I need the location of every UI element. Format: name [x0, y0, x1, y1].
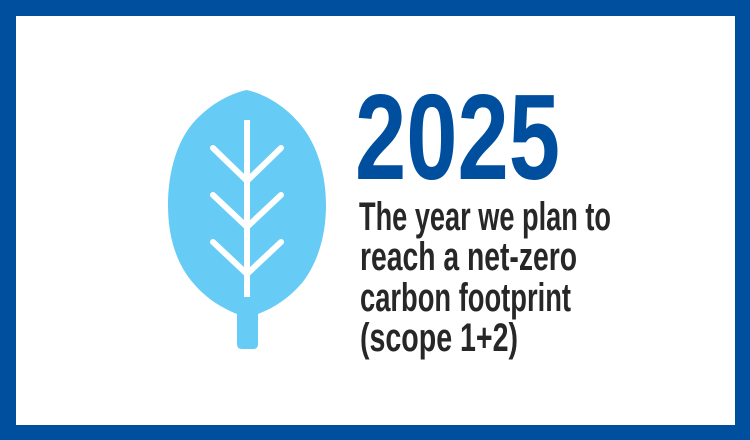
leaf veins	[213, 120, 281, 297]
text block: description	[359, 195, 611, 360]
text block: description: (scope 1+2)	[360, 316, 518, 360]
leaf stem	[237, 310, 258, 349]
text block: description: carbon footprint	[360, 276, 571, 320]
text block: description: The year we plan to	[359, 195, 611, 239]
icon: leaf	[168, 90, 326, 349]
text block: description: reach a net-zero	[360, 235, 577, 279]
heading: 2025: 2025	[355, 69, 560, 205]
leaf blade	[168, 90, 326, 314]
